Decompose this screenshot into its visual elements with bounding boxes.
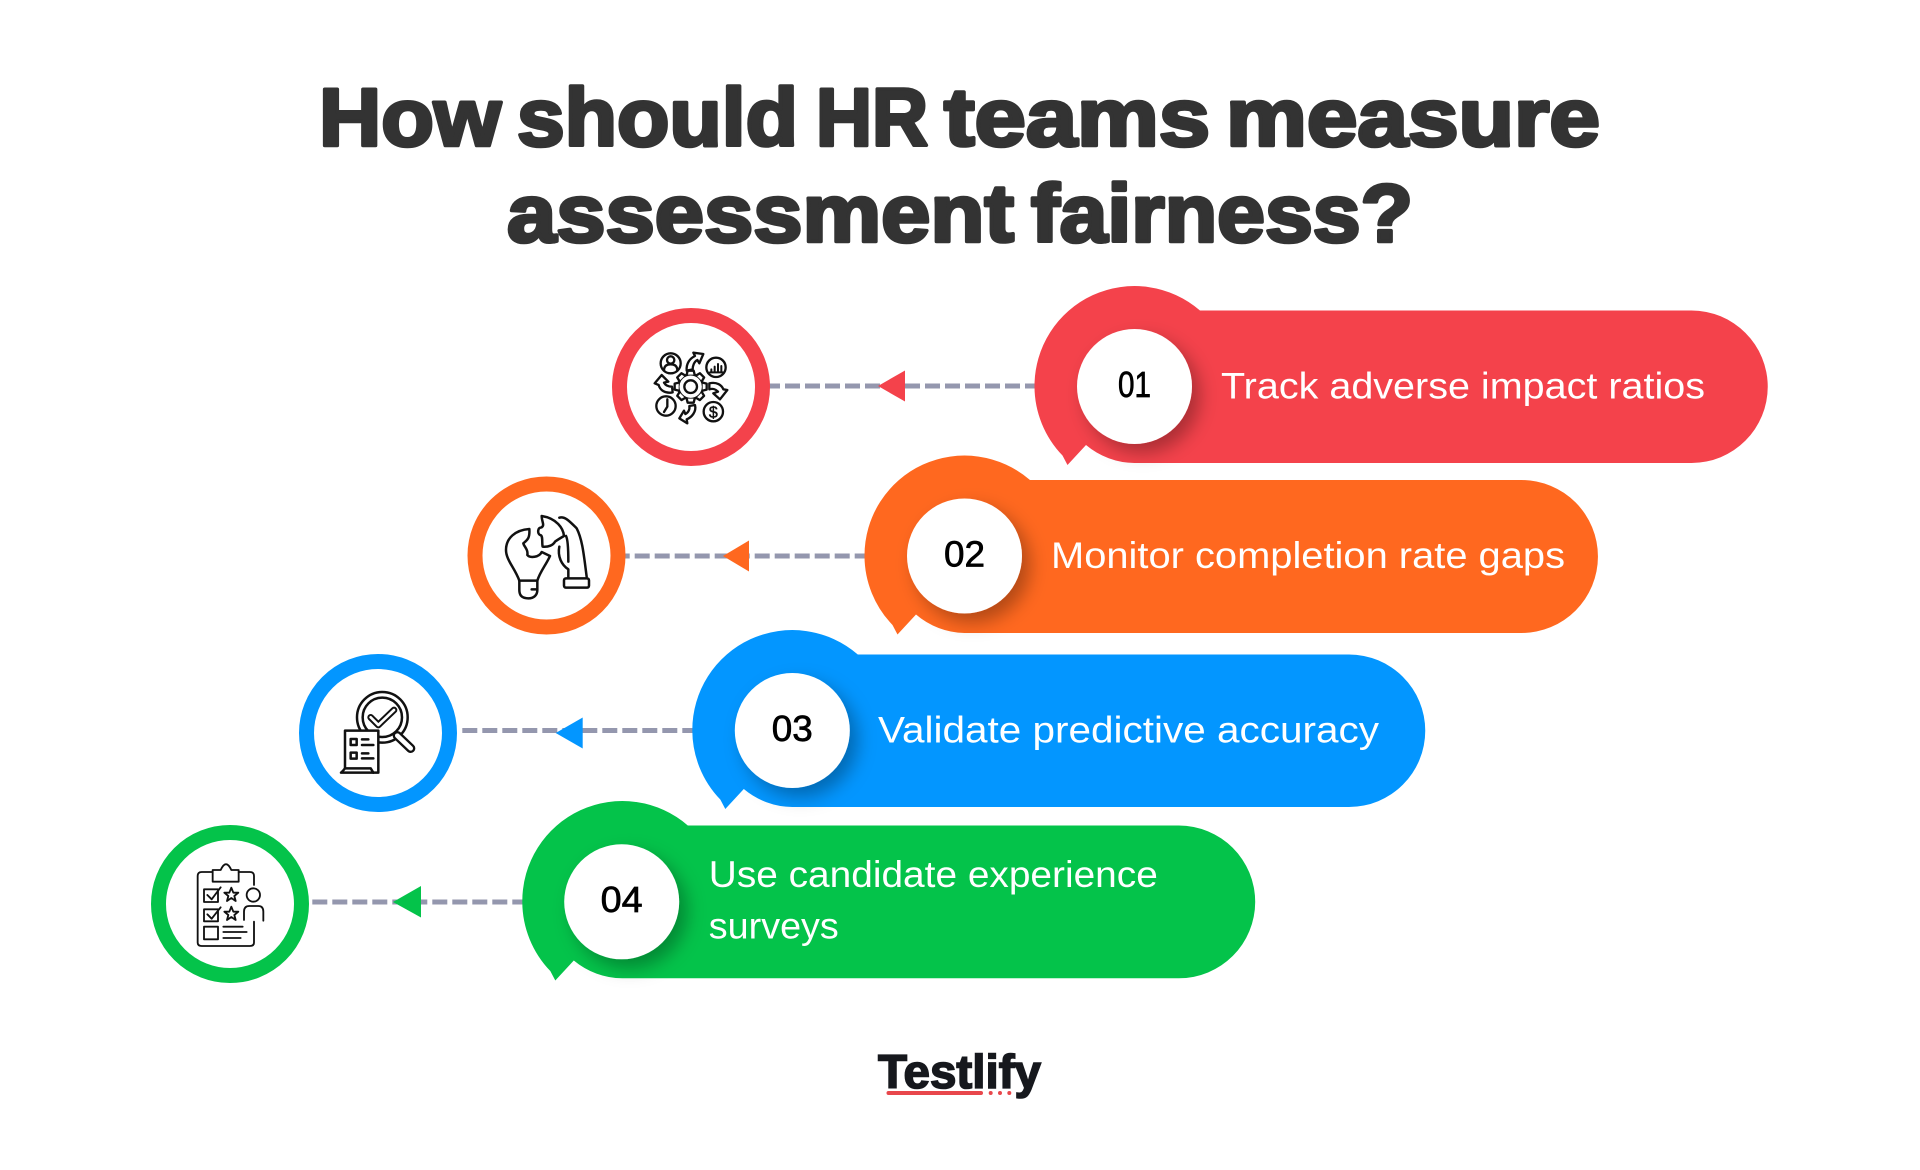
number badge 04: 04 bbox=[601, 879, 643, 920]
icon: gear with metrics: $ bbox=[709, 405, 718, 422]
title: How bbox=[319, 72, 501, 164]
label 01: Track adverse impact ratios bbox=[1221, 366, 1705, 406]
number badge 03 bbox=[735, 673, 850, 788]
title: teams bbox=[944, 72, 1210, 164]
title: fairness? bbox=[1031, 168, 1413, 260]
label 03: Validate predictive accuracy bbox=[878, 710, 1380, 750]
number badge 02: 02 bbox=[944, 534, 985, 574]
bubble 03 bbox=[692, 630, 1425, 809]
bubble 02 bbox=[864, 456, 1598, 634]
title: measure bbox=[1226, 72, 1600, 164]
number badge 01 bbox=[1077, 329, 1192, 444]
title bbox=[319, 72, 1600, 260]
icon ring 01 bbox=[620, 316, 762, 458]
connector 01 bbox=[765, 370, 1040, 402]
title: assessment bbox=[507, 168, 1014, 260]
label 04: surveys bbox=[709, 906, 839, 946]
bubble 01 bbox=[1034, 286, 1768, 465]
icon: magnifier with checklist bbox=[341, 692, 411, 773]
number badge 03: 03 bbox=[772, 708, 813, 749]
step 02: monitor completion rate gaps bbox=[475, 456, 1598, 634]
title: HR bbox=[816, 72, 928, 164]
icon: lightbulb puzzle and hand bbox=[506, 516, 589, 598]
number badge 04 bbox=[564, 844, 679, 959]
connector 03 bbox=[462, 718, 700, 748]
logo: Testlify: Testlify bbox=[878, 1045, 1041, 1098]
icon: clipboard with ratings and person bbox=[198, 864, 263, 946]
title: should bbox=[517, 72, 798, 164]
number badge 01: 01 bbox=[1118, 364, 1151, 405]
label 04: Use candidate experience bbox=[709, 854, 1158, 895]
label 04 bbox=[709, 854, 1158, 946]
connector 02 bbox=[615, 540, 870, 572]
step 04: use candidate experience surveys bbox=[158, 801, 1255, 980]
label 02: Monitor completion rate gaps bbox=[1051, 535, 1565, 576]
icon ring 02 bbox=[475, 484, 618, 627]
icon ring 03 bbox=[306, 662, 450, 804]
bubble 04 bbox=[522, 801, 1255, 980]
number badge 02 bbox=[907, 498, 1022, 614]
step 01: track adverse impact ratios bbox=[620, 286, 1768, 465]
connector 04 bbox=[292, 886, 530, 918]
icon ring 04 bbox=[158, 832, 302, 976]
icon: gear with metrics bbox=[655, 353, 727, 423]
step 03: validate predictive accuracy bbox=[306, 630, 1425, 809]
